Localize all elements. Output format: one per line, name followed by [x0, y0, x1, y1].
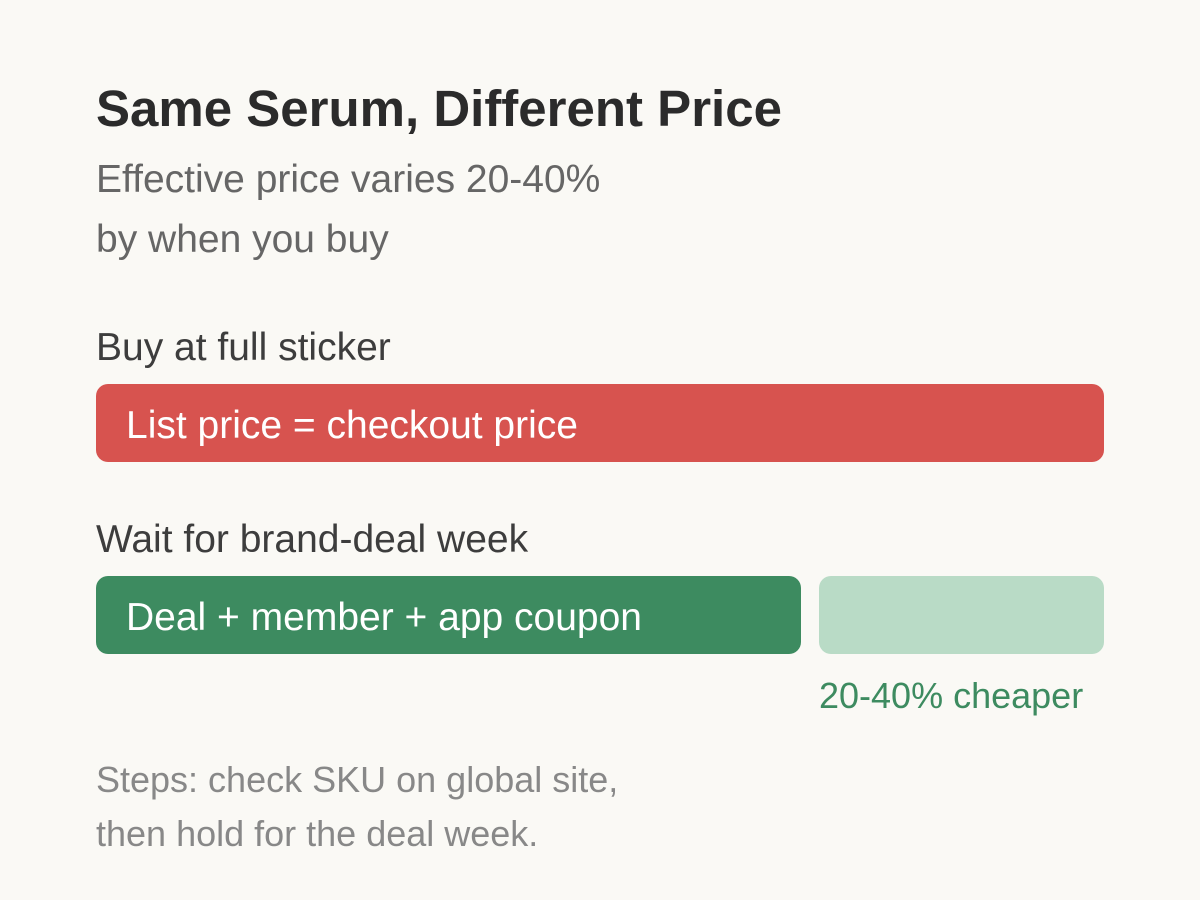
- subtitle: [96, 158, 600, 261]
- footnote: [96, 759, 618, 854]
- bar: savings: [819, 576, 1104, 654]
- label: deal week: Wait for brand-deal week: [96, 518, 528, 561]
- bar label: deal price: Deal + member + app coupon: [126, 596, 642, 639]
- savings label: 20-40% cheaper: [819, 675, 1083, 716]
- label: full sticker: Buy at full sticker: [96, 326, 391, 369]
- footnote: Steps: check SKU on global site,: [96, 759, 618, 800]
- bar: deal price: [96, 576, 801, 654]
- footnote: then hold for the deal week.: [96, 813, 538, 854]
- bar label: list price: List price = checkout price: [126, 404, 578, 447]
- title: Same Serum, Different Price: [96, 80, 782, 137]
- subtitle: Effective price varies 20-40%: [96, 158, 600, 201]
- subtitle: by when you buy: [96, 218, 389, 261]
- bar: list price: [96, 384, 1104, 462]
